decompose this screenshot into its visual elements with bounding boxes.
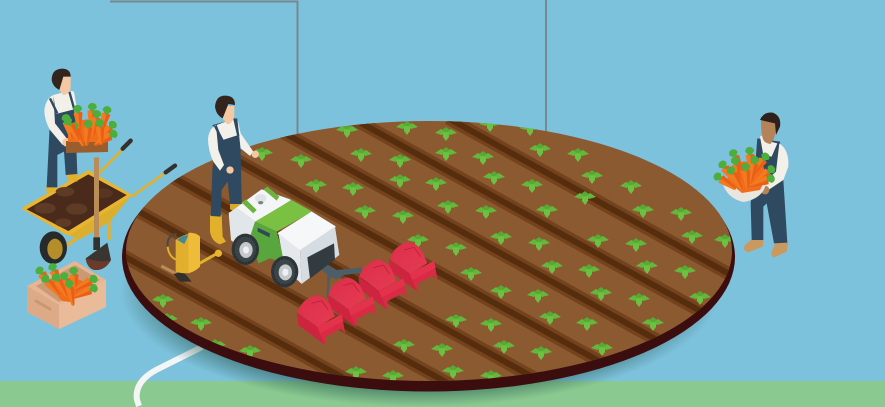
connector line: top left xyxy=(110,2,298,135)
robot front opening xyxy=(307,243,335,279)
overalls xyxy=(47,92,77,187)
robot rear body xyxy=(237,190,290,222)
shirt xyxy=(44,95,67,145)
bowl xyxy=(722,180,767,202)
trowel xyxy=(161,266,177,274)
plot rim xyxy=(122,122,735,392)
person: middle farmer xyxy=(208,96,259,244)
shovel xyxy=(86,157,111,270)
shoes xyxy=(744,238,763,252)
seeder: front xyxy=(297,295,345,345)
robot wheels xyxy=(232,234,259,265)
plot shadow xyxy=(120,173,720,407)
shirt xyxy=(760,135,777,157)
seeder: third xyxy=(358,259,407,309)
carrots xyxy=(61,103,119,149)
carrots xyxy=(34,262,99,307)
carrot crate: held by left farmer xyxy=(61,103,119,153)
robot sensors xyxy=(242,199,257,213)
circular soil plot xyxy=(120,118,740,392)
wheelbarrow xyxy=(21,141,175,264)
head xyxy=(59,77,71,95)
overalls xyxy=(211,118,242,217)
can handle xyxy=(168,234,177,260)
head xyxy=(761,121,776,144)
head xyxy=(223,106,234,124)
person: left farmer with crate xyxy=(44,69,77,193)
robot with seeders xyxy=(229,187,438,345)
person: right farmer with bowl xyxy=(722,113,788,258)
barrow legs and wheel xyxy=(60,220,109,250)
overalls xyxy=(751,138,787,243)
handles xyxy=(98,147,170,197)
tow arm xyxy=(317,262,362,297)
can body xyxy=(176,234,200,273)
spout xyxy=(197,253,217,265)
seeder: second xyxy=(328,277,376,327)
robot green band xyxy=(255,200,312,232)
furrows xyxy=(120,118,740,385)
carrots: bowl xyxy=(712,147,777,193)
connector line: top centre xyxy=(545,0,547,132)
boots xyxy=(46,174,77,193)
connector line: white curve xyxy=(137,347,202,406)
ground strip xyxy=(0,381,885,407)
shirt xyxy=(208,125,224,171)
robot front body xyxy=(278,212,335,250)
hand xyxy=(761,186,769,194)
carrot crate: on the ground xyxy=(27,261,106,329)
hand xyxy=(62,138,71,147)
barrow bin xyxy=(68,195,132,239)
seeder: rear xyxy=(389,242,438,292)
seedlings xyxy=(152,118,736,384)
boots xyxy=(210,215,226,244)
plot soil xyxy=(126,121,732,381)
hands xyxy=(226,166,234,174)
watering can xyxy=(161,233,222,282)
